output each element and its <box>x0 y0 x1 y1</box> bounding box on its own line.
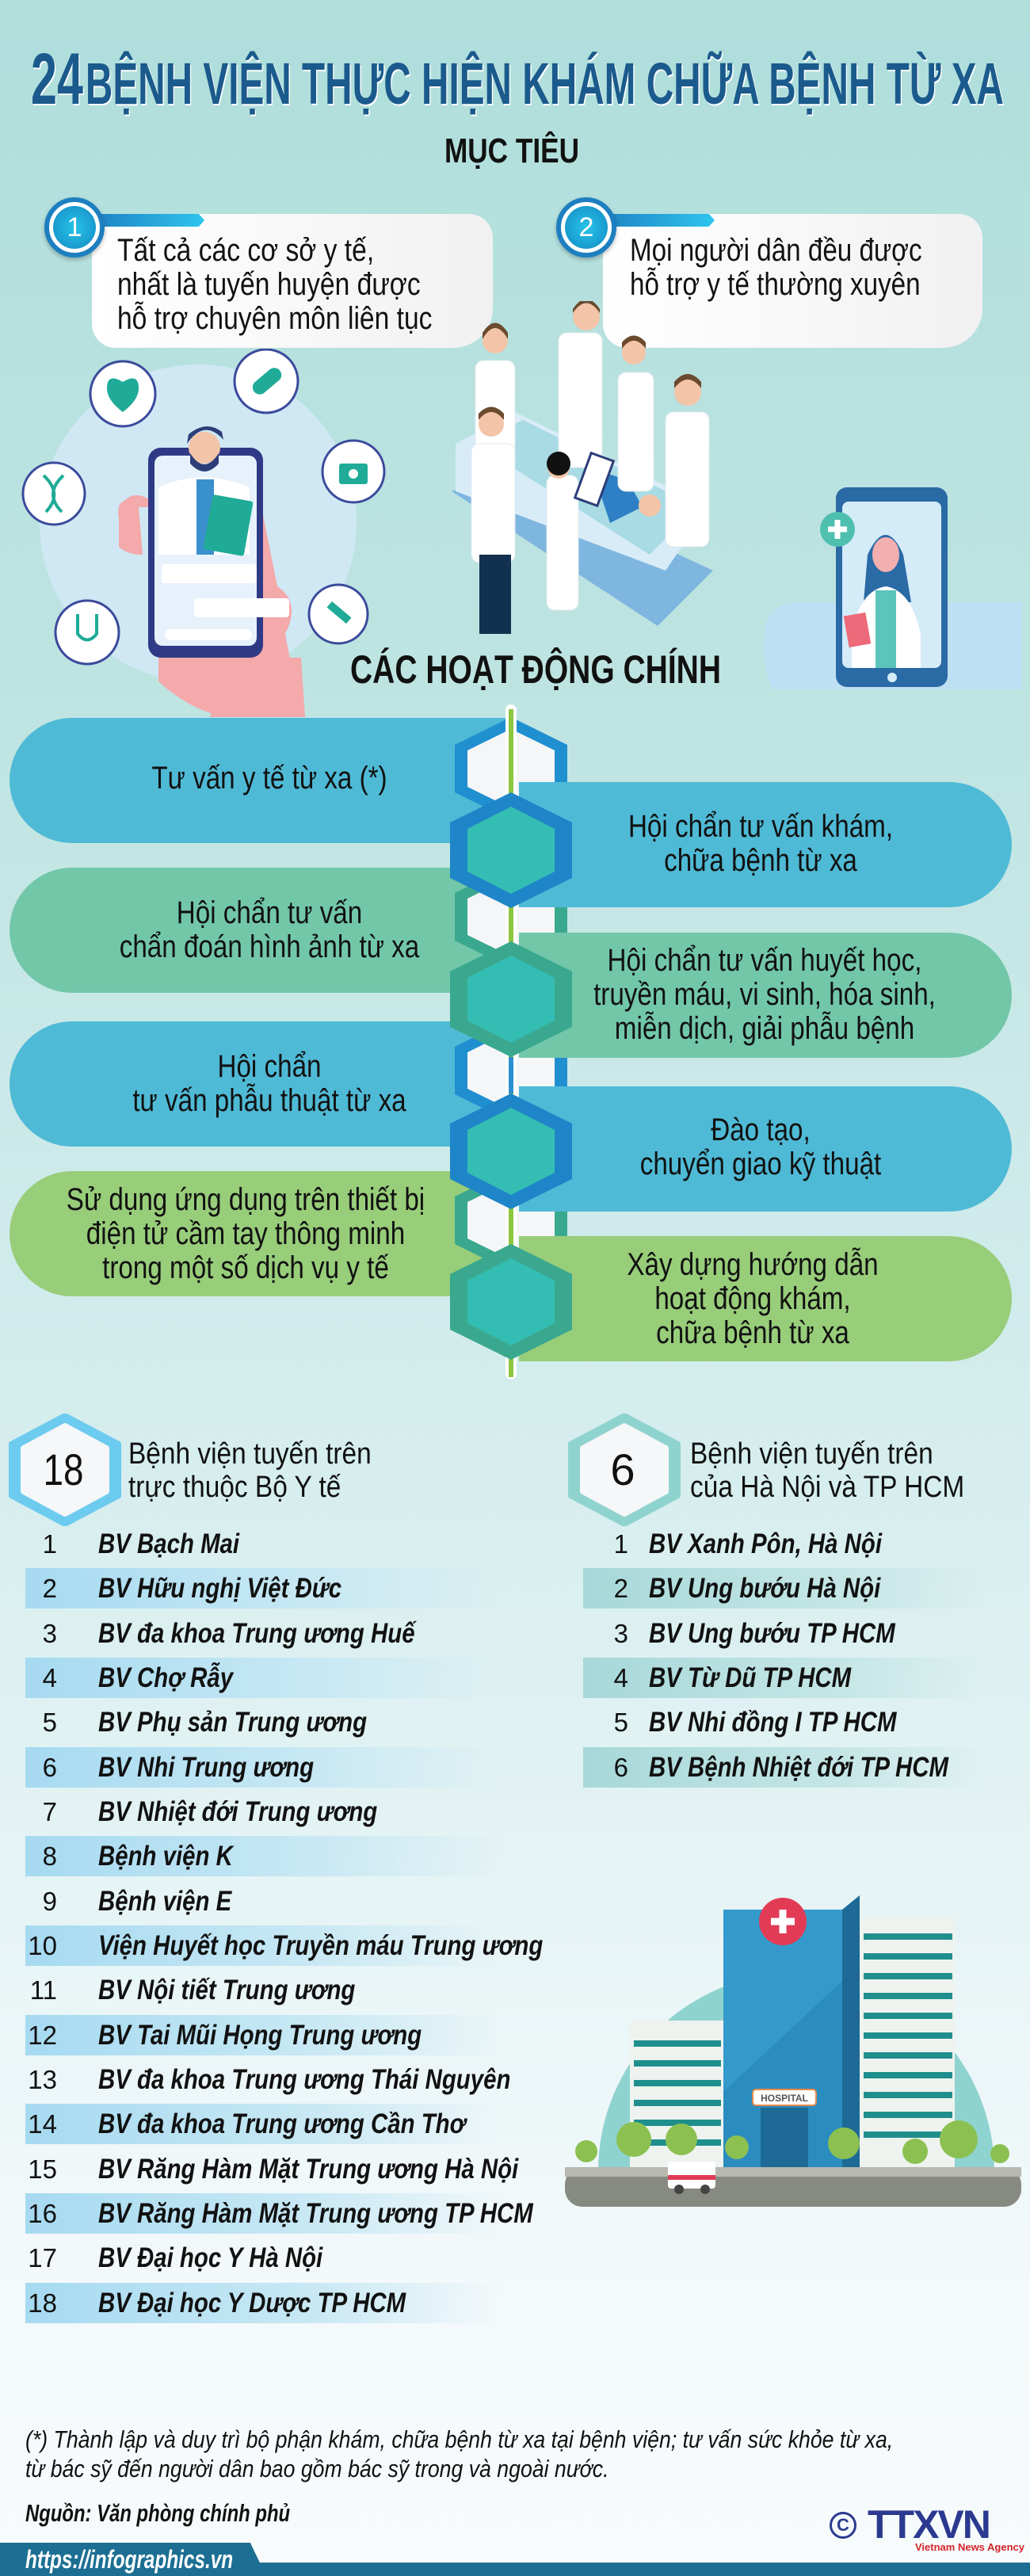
activity text 3: chẩn đoán hình ảnh từ xa <box>120 929 419 964</box>
pill left 2 <box>10 868 517 993</box>
list: 18 central hospitals: 9 <box>43 1887 57 1916</box>
hexagon badge 18: 18 <box>43 1445 84 1494</box>
list: 18 central hospitals: BV Nhi Trung ương <box>98 1752 314 1783</box>
list: 18 central hospitals: BV đa khoa Trung ương Thái Nguyên <box>98 2064 510 2095</box>
list: 6 city hospitals: 4 <box>614 1663 628 1693</box>
TTXVN wordmark: TTXVN <box>868 2502 990 2547</box>
blue tab <box>101 214 204 227</box>
list: 6 city hospitals: 6 <box>614 1753 628 1782</box>
badge 18 header <box>9 1414 372 1526</box>
list: 18 central hospitals: BV Đại học Y Hà Nội <box>98 2242 322 2273</box>
goal 1 box <box>42 197 493 348</box>
badge 6 header <box>568 1414 964 1526</box>
website url: https://infographics.vn <box>25 2545 233 2574</box>
activity text 6: Đào tạo, <box>711 1112 811 1147</box>
goal 2 text: hỗ trợ y tế thường xuyên <box>630 267 921 302</box>
list: 18 central hospitals: BV Chợ Rẫy <box>98 1662 233 1693</box>
list: 18 central hospitals: BV Nhiệt đới Trung ương <box>98 1796 377 1827</box>
pill left 4 <box>10 1171 517 1296</box>
label 6 <box>690 1437 964 1504</box>
list: 18 central hospitals: BV đa khoa Trung ương Huế <box>98 1618 415 1649</box>
footer bar <box>0 2543 1030 2576</box>
activity text 2: Hội chẩn tư vấn khám, <box>628 809 893 844</box>
label 18: trực thuộc Bộ Y tế <box>128 1471 341 1504</box>
list: 18 central hospitals: 7 <box>43 1797 57 1826</box>
list: 18 central hospitals: BV Bạch Mai <box>98 1528 239 1559</box>
list: 18 central hospitals: BV đa khoa Trung ương Cần Thơ <box>98 2109 465 2139</box>
copyright icon: C <box>837 2515 849 2535</box>
hexagon badge 6 <box>568 1414 681 1526</box>
goal 2 box <box>554 197 982 348</box>
heading: muc tieu: MỤC TIÊU <box>444 132 579 170</box>
list: 18 central hospitals: BV Phụ sản Trung ương <box>98 1707 367 1738</box>
activity text 6 <box>640 1112 881 1181</box>
list: 18 central hospitals: 13 <box>28 2065 57 2094</box>
list: 18 central hospitals: Viện Huyết học Truyền máu Trung ương <box>98 1930 543 1961</box>
footnote <box>25 2425 893 2483</box>
logo: TTXVN <box>830 2502 1024 2553</box>
illustration: doctor on phone in hand <box>22 349 385 717</box>
list: 18 central hospitals: 16 <box>28 2199 57 2228</box>
pill left 3 <box>10 1021 517 1147</box>
list: 18 central hospitals: 5 <box>43 1708 57 1737</box>
activity text 1: Tư vấn y tế từ xa (*) <box>151 761 387 796</box>
activity text 8: Xây dựng hướng dẫn <box>627 1247 879 1282</box>
list: 18 central hospitals: Bệnh viện K <box>98 1841 233 1872</box>
box background <box>92 214 493 348</box>
number badge 1 <box>44 197 105 258</box>
footnote: (*) Thành lập và duy trì bộ phận khám, chữa bệnh từ xa tại bệnh viện; tư vấn sức khỏe từ xa, <box>25 2425 893 2453</box>
illustration: female doctor on phone <box>764 487 1022 689</box>
teal hexagon nodes <box>450 792 572 1377</box>
agency name: Vietnam News Agency <box>915 2541 1024 2553</box>
list: 6 city hospitals: 5 <box>614 1708 628 1737</box>
list: 18 central hospitals: 6 <box>43 1753 57 1782</box>
list: 18 central hospitals: BV Nội tiết Trung ương <box>98 1975 355 2005</box>
list: 18 central hospitals: BV Răng Hàm Mặt Trung ương TP HCM <box>98 2198 533 2229</box>
list: 6 city hospitals: 2 <box>614 1574 628 1603</box>
goal 1 text: nhất là tuyến huyện được <box>117 267 421 302</box>
activity text 4: Hội chẩn tư vấn huyết học, <box>608 943 921 978</box>
list: 18 central hospitals: 10 <box>28 1931 57 1960</box>
pill right 3 <box>519 1086 1012 1212</box>
number badge 2 <box>556 197 616 258</box>
activity text 7: điện tử cầm tay thông minh <box>86 1216 405 1251</box>
activities chart <box>10 704 1012 1380</box>
list: 18 central hospitals: 14 <box>28 2109 57 2139</box>
pill left 1 <box>10 718 517 843</box>
hexagon badge 6: 6 <box>610 1444 635 1494</box>
label 6: của Hà Nội và TP HCM <box>690 1471 964 1504</box>
list: 18 central hospitals: Bệnh viện E <box>98 1886 231 1917</box>
heading: cac hoat dong chinh: CÁC HOẠT ĐỘNG CHÍNH <box>350 647 721 692</box>
illustration: doctors around bed <box>452 301 713 634</box>
activity text 7 <box>67 1182 425 1285</box>
hexagon badge 18 <box>9 1414 121 1526</box>
activity text 5: tư vấn phẫu thuật từ xa <box>132 1083 406 1118</box>
list: 18 central hospitals: 15 <box>28 2154 57 2184</box>
list: 18 central hospitals: BV Răng Hàm Mặt Trung ương Hà Nội <box>98 2154 518 2185</box>
list: 18 central hospitals: 1 <box>43 1529 57 1559</box>
activity text 8 <box>627 1247 879 1350</box>
list: 6 city hospitals: BV Bệnh Nhiệt đới TP HCM <box>649 1752 948 1783</box>
blue tab <box>613 214 715 227</box>
list: 6 city hospitals: BV Nhi đồng I TP HCM <box>649 1707 896 1738</box>
list: 18 central hospitals: BV Tai Mũi Họng Trung ương <box>98 2020 422 2051</box>
box background <box>603 214 982 348</box>
list: 6 city hospitals: 1 <box>614 1529 628 1559</box>
list: 18 central hospitals: 18 <box>28 2288 57 2318</box>
activity text 4: truyền máu, vi sinh, hóa sinh, <box>593 977 936 1012</box>
illustration: hospital building: HOSPITAL <box>761 2093 808 2104</box>
list: 18 central hospitals: BV Đại học Y Dược TP HCM <box>98 2288 406 2318</box>
number badge 1: 1 <box>67 212 82 242</box>
activity text 3 <box>120 895 420 964</box>
activity text 7: Sử dụng ứng dụng trên thiết bị <box>67 1182 425 1217</box>
activity text 6: chuyển giao kỹ thuật <box>640 1147 881 1181</box>
activity text 8: hoạt động khám, <box>654 1281 851 1316</box>
list: 6 city hospitals: BV Xanh Pôn, Hà Nội <box>649 1528 882 1559</box>
activity text 2 <box>628 809 893 878</box>
label 18 <box>128 1437 372 1504</box>
activity text 4 <box>593 943 936 1046</box>
footnote: từ bác sỹ đến người dân bao gồm bác sỹ trong và ngoài nước. <box>25 2455 609 2483</box>
title: 24 BỆNH VIỆN THỰC HIỆN KHÁM CHỮA BỆNH TỪ XA <box>31 39 1004 120</box>
activity text 2: chữa bệnh từ xa <box>664 843 857 878</box>
chain of hexagons <box>455 704 567 1380</box>
goal 1 text: Tất cả các cơ sở y tế, <box>117 233 374 268</box>
list: 6 city hospitals: BV Ung bướu TP HCM <box>649 1618 895 1649</box>
activity text 3: Hội chẩn tư vấn <box>177 895 362 930</box>
list: 6 city hospitals: BV Từ Dũ TP HCM <box>649 1662 851 1693</box>
label 6: Bệnh viện tuyến trên <box>690 1437 933 1471</box>
illustration: hospital building <box>565 1895 1021 2207</box>
list: 18 central hospitals: 8 <box>43 1841 57 1871</box>
list: 18 central hospitals: 12 <box>28 2021 57 2050</box>
pill right 1 <box>519 782 1012 907</box>
list: 18 central hospitals <box>25 1528 543 2323</box>
list: 18 central hospitals: 2 <box>43 1574 57 1603</box>
goal 2 text: Mọi người dân đều được <box>630 233 922 268</box>
goal 1 text: hỗ trợ chuyên môn liên tục <box>117 301 432 336</box>
list: 18 central hospitals: 17 <box>28 2243 57 2273</box>
goal 1 text <box>117 233 432 336</box>
pill right 2 <box>519 933 1012 1058</box>
list: 18 central hospitals: 11 <box>30 1975 57 2005</box>
activity text 5: Hội chẩn <box>217 1049 322 1084</box>
activity text 4: miễn dịch, giải phẫu bệnh <box>615 1011 914 1046</box>
goal 2 text <box>630 233 922 302</box>
label 18: Bệnh viện tuyến trên <box>128 1437 372 1471</box>
list: 18 central hospitals: 4 <box>43 1663 57 1693</box>
number badge 2: 2 <box>579 212 593 242</box>
list: 6 city hospitals <box>583 1528 949 1788</box>
activity text 7: trong một số dịch vụ y tế <box>102 1250 389 1285</box>
pill right 4 <box>519 1236 1012 1361</box>
list: 18 central hospitals: 3 <box>43 1619 57 1648</box>
activity text 5 <box>132 1049 406 1118</box>
list: 6 city hospitals: 3 <box>614 1619 628 1648</box>
list: 18 central hospitals: BV Hữu nghị Việt Đức <box>98 1573 341 1604</box>
source: Nguồn: Văn phòng chính phủ <box>25 2499 290 2527</box>
activity text 8: chữa bệnh từ xa <box>656 1315 849 1350</box>
copyright icon <box>830 2512 856 2539</box>
list: 6 city hospitals: BV Ung bướu Hà Nội <box>649 1573 880 1604</box>
